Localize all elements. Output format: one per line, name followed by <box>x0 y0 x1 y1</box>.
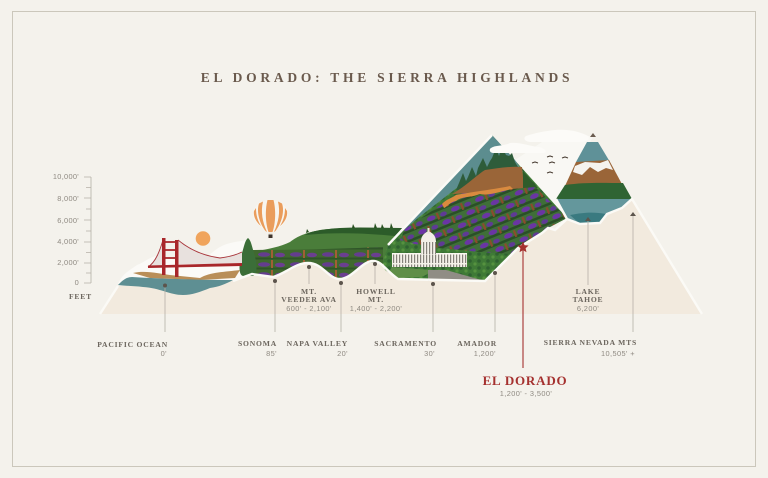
title: EL DORADO: THE SIERRA HIGHLANDS <box>201 70 573 85</box>
label: howell mt: 1,400' - 2,200' <box>350 304 402 313</box>
label: sonoma <box>238 339 277 358</box>
sun <box>196 231 210 246</box>
elevation scale <box>53 172 92 301</box>
label: lake tahoe: LAKE <box>576 287 600 296</box>
lake <box>556 199 632 224</box>
lawn left <box>389 267 432 278</box>
label: amador <box>457 339 497 358</box>
label: sierra nevada <box>544 338 637 358</box>
label: sonoma: SONOMA <box>238 339 277 348</box>
label: el dorado: 1,200' - 3,500' <box>500 389 552 398</box>
label: sierra nevada: 10,505' + <box>601 349 635 358</box>
label: howell mt: MT. <box>368 295 384 304</box>
el dorado marker <box>517 242 529 368</box>
sky between mountains <box>515 130 593 218</box>
label: sacramento: SACRAMENTO <box>374 339 437 348</box>
label: sierra nevada: SIERRA NEVADA MTS <box>544 338 637 347</box>
label: napa valley: 20' <box>337 349 348 358</box>
label: mt veeder: 600' - 2,100' <box>286 304 332 313</box>
label: pacific ocean: PACIFIC OCEAN <box>97 340 168 349</box>
birds <box>532 156 568 173</box>
teal sky <box>388 135 523 245</box>
golden gate bridge <box>148 238 242 277</box>
forest <box>556 183 632 199</box>
brown slope <box>452 167 524 194</box>
hot air balloon <box>253 200 288 238</box>
brown range <box>565 160 623 186</box>
capitol building <box>392 228 467 267</box>
mountain one <box>383 135 567 281</box>
label: sonoma: 85' <box>266 349 277 358</box>
elevation scale: FEET <box>69 292 92 301</box>
elevation scale: 0 <box>75 278 79 287</box>
mountain two <box>556 142 632 224</box>
tree <box>240 238 256 276</box>
bay water <box>118 277 233 295</box>
elevation scale: 4,000' <box>57 237 79 246</box>
label: amador: 1,200' <box>474 349 496 358</box>
label: el dorado <box>483 373 567 398</box>
road <box>428 270 485 281</box>
label: pacific ocean <box>97 340 168 358</box>
elevation scale: 10,000' <box>53 172 79 181</box>
label: napa valley <box>287 339 348 358</box>
label: mt veeder: MT. <box>301 287 317 296</box>
vineyard hills left <box>250 223 402 279</box>
vineyard slope <box>400 187 567 254</box>
label: amador: AMADOR <box>457 339 497 348</box>
cloud right <box>524 130 589 142</box>
label: howell mt: HOWELL <box>356 287 396 296</box>
label: napa valley: NAPA VALLEY <box>287 339 348 348</box>
label: mt veeder <box>281 287 337 313</box>
peak marker <box>590 133 596 137</box>
label: mt veeder: VEEDER AVA <box>281 295 337 304</box>
label: el dorado: EL DORADO <box>483 373 567 388</box>
label: pacific ocean: 0' <box>161 349 167 358</box>
label: lake tahoe: TAHOE <box>573 295 603 304</box>
white terrain outline <box>100 135 702 314</box>
elevation scale: 8,000' <box>57 194 79 203</box>
green base <box>383 135 567 281</box>
label: howell mt <box>350 287 402 313</box>
elevation scale: 6,000' <box>57 216 79 225</box>
orange flowers <box>442 186 513 208</box>
beige ground cross-section <box>100 199 702 314</box>
label: sacramento <box>374 339 437 358</box>
lake deep <box>570 213 606 224</box>
shore left <box>133 270 240 280</box>
label: lake tahoe: 6,200' <box>577 304 599 313</box>
leader lines <box>163 212 636 332</box>
elevation scale: 2,000' <box>57 258 79 267</box>
cloud band behind bridge <box>118 240 250 284</box>
label: sacramento: 30' <box>424 349 435 358</box>
snow cap <box>573 160 613 175</box>
dark slope <box>523 171 538 188</box>
label: lake tahoe <box>573 287 603 313</box>
cloud peak <box>490 143 546 153</box>
teal peak <box>576 142 610 162</box>
trees on ridge <box>456 147 522 192</box>
